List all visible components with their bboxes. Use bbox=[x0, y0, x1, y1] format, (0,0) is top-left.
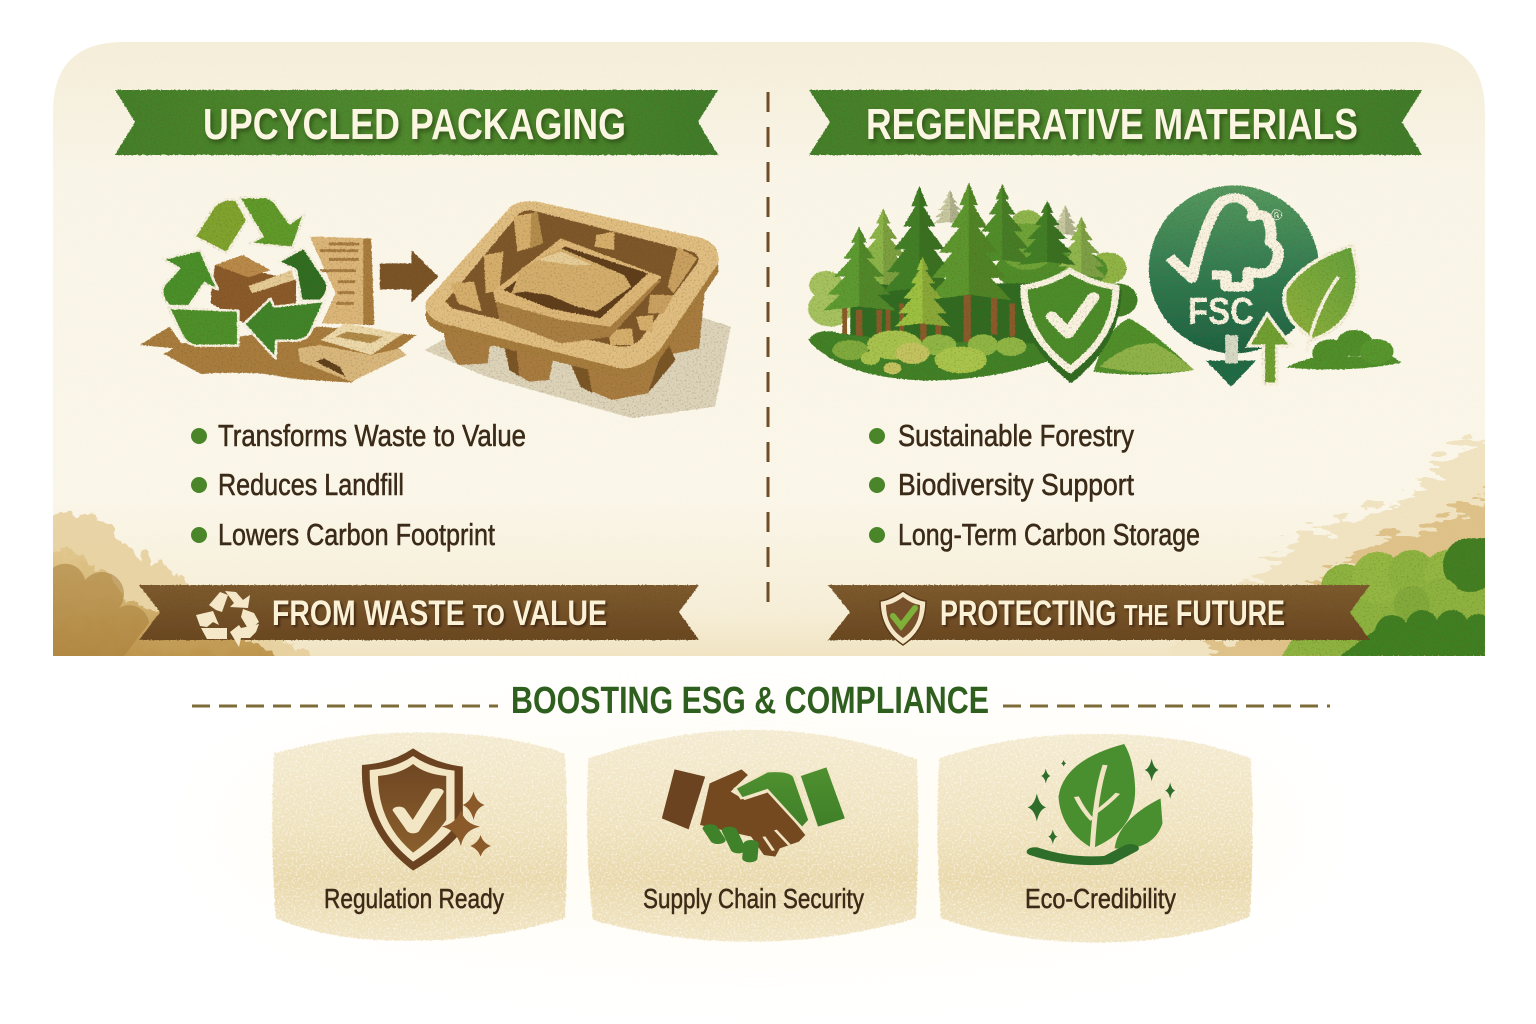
label: Supply Chain Security bbox=[643, 883, 864, 914]
card: regulation ready bbox=[272, 733, 567, 941]
illustration: waste to packaging bbox=[140, 197, 731, 418]
icon: small shield bbox=[880, 591, 926, 645]
icon: shield check bbox=[1019, 267, 1121, 383]
card: eco-credibility bbox=[937, 734, 1253, 943]
bullet 2: Reduces Landfill bbox=[218, 467, 404, 502]
ground and bushes bbox=[808, 330, 1047, 381]
title: regenerative materials: REGENERATIVE MATERIALS bbox=[866, 100, 1358, 149]
bullet 1: Transforms Waste to Value bbox=[218, 418, 526, 453]
registered mark: ® bbox=[1271, 207, 1282, 224]
icon: leaf with bush bbox=[1284, 245, 1402, 369]
list: upcycled benefits bbox=[191, 418, 526, 552]
cards group bbox=[272, 730, 1253, 943]
section: regenerative materials heading bbox=[809, 90, 1422, 155]
label: Regulation Ready bbox=[324, 883, 504, 914]
banner: protecting the future bbox=[828, 585, 1370, 645]
flat cardboard pieces bbox=[298, 323, 407, 382]
icon: handshake bbox=[662, 767, 845, 858]
divider bbox=[766, 92, 770, 610]
faint page glow bbox=[220, 700, 1300, 960]
icon: shield bbox=[362, 748, 491, 871]
label: PROTECTING THE FUTURE bbox=[940, 594, 1285, 633]
bullet 2: Biodiversity Support bbox=[898, 467, 1134, 502]
card: supply chain security bbox=[587, 730, 918, 942]
icon: molded pulp tray bbox=[424, 201, 731, 418]
icon: recycle bbox=[196, 591, 259, 647]
hill bbox=[1093, 318, 1194, 375]
background: left tan foliage bbox=[53, 510, 310, 656]
arrow bbox=[380, 250, 438, 302]
box bbox=[211, 255, 296, 323]
bullet 3: Long-Term Carbon Storage bbox=[898, 517, 1200, 552]
icon: forest bbox=[808, 183, 1194, 381]
heading text: BOOSTING ESG & COMPLIANCE bbox=[511, 680, 989, 722]
icon: leaf sparkle bbox=[1028, 744, 1175, 861]
label: Eco-Credibility bbox=[1025, 883, 1176, 914]
background: right tan burst bbox=[1176, 434, 1485, 656]
bullet 1: Sustainable Forestry bbox=[898, 418, 1134, 453]
illustration: forest and certification bbox=[808, 183, 1402, 387]
bullet 3: Lowers Carbon Footprint bbox=[218, 517, 495, 552]
panel: main background bbox=[30, 42, 1510, 680]
label: FROM WASTE TO VALUE bbox=[272, 594, 607, 633]
icon: FSC badge bbox=[1149, 185, 1319, 387]
banner: from waste to value bbox=[139, 585, 699, 647]
list: regenerative benefits bbox=[869, 418, 1200, 552]
icon: cardboard scrap pile bbox=[140, 237, 417, 383]
FSC label: FSC bbox=[1188, 291, 1254, 333]
title: upcycled packaging: UPCYCLED PACKAGING bbox=[203, 100, 626, 149]
background: green bushes bbox=[1282, 538, 1506, 656]
icon: up arrow bbox=[1248, 314, 1291, 384]
section: upcycled packaging heading bbox=[115, 90, 718, 155]
icon: recycling arrows bbox=[162, 197, 328, 358]
paper sheet bbox=[310, 237, 374, 325]
